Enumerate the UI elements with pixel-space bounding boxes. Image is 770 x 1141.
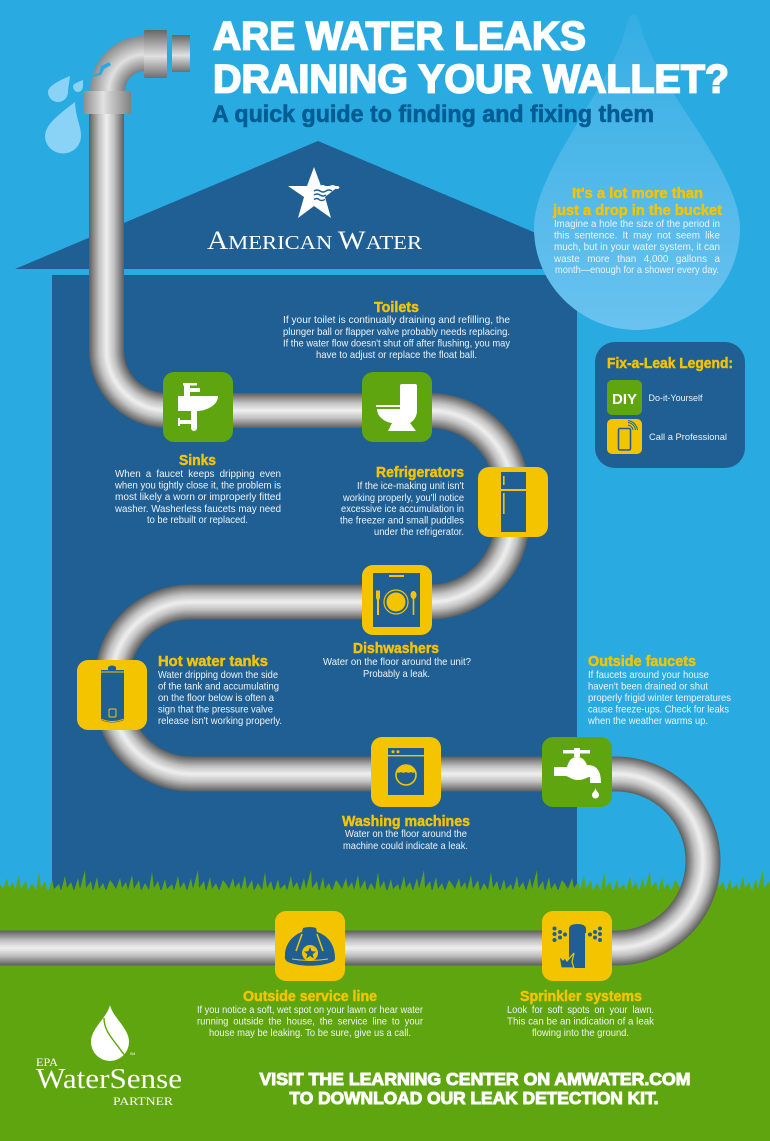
panel: legend: Fix-a-Leak Legend: — [607, 356, 733, 372]
text: dishwashers: Probably a leak. — [363, 669, 430, 680]
icon: DIY — [607, 380, 642, 415]
drop callout: It's a lot more than — [572, 186, 703, 202]
text: outside faucets: properly frigid winter temperatures — [588, 693, 731, 704]
drop callout: just a drop in the bucket — [552, 203, 722, 219]
icon: washing machine — [371, 737, 441, 807]
upper flange — [144, 30, 167, 78]
text: refrigerators: excessive ice accumulation in — [341, 504, 464, 515]
text: sprinkler systems — [507, 989, 655, 1039]
drop callout: much, but in your water system, it can — [554, 242, 720, 253]
text: hot water tanks: on the floor below is often a — [158, 693, 274, 704]
text: outside faucets: cause freeze-ups. Check for leaks — [588, 704, 729, 716]
text: sinks — [114, 453, 281, 526]
text: outside faucets: when the weather warms up. — [587, 716, 708, 727]
text: toilets: plunger ball or flapper valve probably needs replacing. — [283, 327, 510, 338]
text: outside service line: If you notice a soft, wet spot on your lawn or hear water — [197, 1005, 423, 1016]
text: sinks: washer. Washerless faucets may need — [114, 504, 281, 515]
text: hot water tanks — [158, 654, 282, 727]
text: sprinkler systems: This can be an indication of a leak — [507, 1016, 655, 1028]
drop callout: Imagine a hole the size of the period in — [554, 219, 720, 230]
grass — [0, 866, 770, 1141]
text: outside faucets: haven't been drained or shut — [588, 682, 708, 692]
icon: hot water tank — [77, 660, 147, 730]
house roof — [15, 141, 621, 269]
WaterSense logo: EPA — [36, 1057, 59, 1069]
subtitle: A quick guide to finding and fixing them — [212, 101, 654, 128]
text: outside service line: house may be leaking. To be sure, give us a call. — [209, 1028, 411, 1039]
pipe — [0, 112, 703, 948]
text: washing machines — [342, 814, 470, 852]
text: sinks: Sinks — [179, 453, 216, 469]
call to action: VISIT THE LEARNING CENTER ON AMWATER.COM — [260, 1069, 690, 1089]
drop callout: this sentence. It may not seem like — [554, 230, 720, 242]
American Water logo — [207, 167, 423, 255]
lower flange — [83, 91, 131, 114]
text: toilets: If the water flow doesn't shut off after flushing, you may — [283, 338, 511, 350]
icon: dishwasher — [362, 565, 432, 635]
logo wordmark: AMERICAN WATER — [207, 226, 423, 255]
WaterSense logo — [36, 1005, 182, 1108]
text: outside service line — [197, 989, 423, 1039]
text: sinks: When a faucet keeps dripping even — [115, 469, 281, 480]
text: outside faucets: Outside faucets — [588, 654, 696, 670]
drop callout — [552, 186, 722, 276]
icon: water drips — [45, 76, 83, 154]
text: toilets: Toilets — [374, 300, 419, 316]
text: sinks: most likely a worn or improperly fitted — [115, 492, 281, 503]
text: sprinkler systems: flowing into the ground. — [532, 1028, 629, 1039]
text: sinks: when you tightly close it, the problem is — [114, 480, 281, 492]
panel: legend — [595, 342, 745, 468]
WaterSense logo: PARTNER — [113, 1094, 173, 1108]
text: washing machines: machine could indicate a leak. — [343, 841, 468, 852]
text: refrigerators: If the ice-making unit isn't — [357, 481, 464, 492]
text: sinks: to be rebuilt or replaced. — [147, 515, 248, 526]
icon: phone — [607, 419, 642, 454]
house body — [52, 275, 577, 895]
icon: star with waves — [288, 167, 339, 218]
text: sprinkler systems: Sprinkler systems — [520, 989, 642, 1005]
text: washing machines: Water on the floor around the — [345, 829, 467, 840]
leaking pipe elbow — [83, 30, 190, 114]
WaterSense logo: SM — [130, 1052, 135, 1056]
text: hot water tanks: Water dripping down the side — [158, 670, 278, 681]
WaterSense logo: WaterSense — [36, 1064, 182, 1095]
text: outside faucets — [587, 654, 731, 727]
title — [213, 14, 729, 102]
text: sprinkler systems: Look for soft spots on your lawn. — [507, 1005, 654, 1016]
icon: refrigerator — [478, 467, 548, 537]
text: hot water tanks: Hot water tanks — [158, 654, 268, 670]
house — [15, 141, 621, 895]
legend label: call a professional: Call a Professional — [649, 432, 727, 443]
icon: WaterSense drop — [91, 1005, 129, 1061]
text: outside service line: running outside the house, the service line to your — [197, 1016, 423, 1028]
elbow — [90, 36, 145, 91]
crack — [88, 62, 111, 78]
call to action — [260, 1069, 690, 1108]
text: refrigerators: Refrigerators — [376, 465, 464, 481]
text: refrigerators: working properly, you'll notice — [342, 493, 464, 504]
icon: toilet — [362, 372, 432, 442]
drop callout: month—enough for a shower every day. — [555, 265, 719, 276]
text: outside faucets: If faucets around your house — [588, 670, 709, 681]
text: hot water tanks: release isn't working properly. — [158, 716, 282, 727]
text: outside service line: Outside service line — [243, 989, 377, 1005]
text: refrigerators — [340, 465, 464, 538]
large water drop — [534, 15, 740, 330]
text: dishwashers: Water on the floor around the unit? — [323, 657, 471, 668]
text: washing machines: Washing machines — [342, 814, 470, 830]
text: toilets — [283, 300, 511, 361]
icon: sink — [163, 372, 233, 442]
text: toilets: If your toilet is continually draining and refilling, the — [283, 315, 510, 326]
icon: DIY: DIY — [612, 391, 637, 408]
text: dishwashers: Dishwashers — [353, 641, 439, 657]
text: toilets: have to adjust or replace the float ball. — [316, 350, 477, 361]
title: DRAINING YOUR WALLET? — [213, 58, 729, 102]
text: refrigerators: the freezer and small puddles — [340, 516, 464, 526]
icon: sprinkler — [542, 911, 612, 981]
text: refrigerators: under the refrigerator. — [374, 527, 464, 538]
icon: outside faucet — [542, 737, 612, 807]
call to action: TO DOWNLOAD OUR LEAK DETECTION KIT. — [290, 1088, 658, 1108]
text: dishwashers — [323, 641, 471, 680]
separated pipe piece — [172, 35, 190, 72]
drop callout: waste more than 4,000 gallons a — [553, 254, 720, 265]
text: hot water tanks: of the tank and accumulating — [158, 682, 279, 692]
icon: hard hat — [275, 911, 345, 981]
legend label: do it yourself: Do-it-Yourself — [648, 393, 703, 404]
title: ARE WATER LEAKS — [213, 14, 586, 58]
text: hot water tanks: sign that the pressure valve — [158, 704, 273, 716]
